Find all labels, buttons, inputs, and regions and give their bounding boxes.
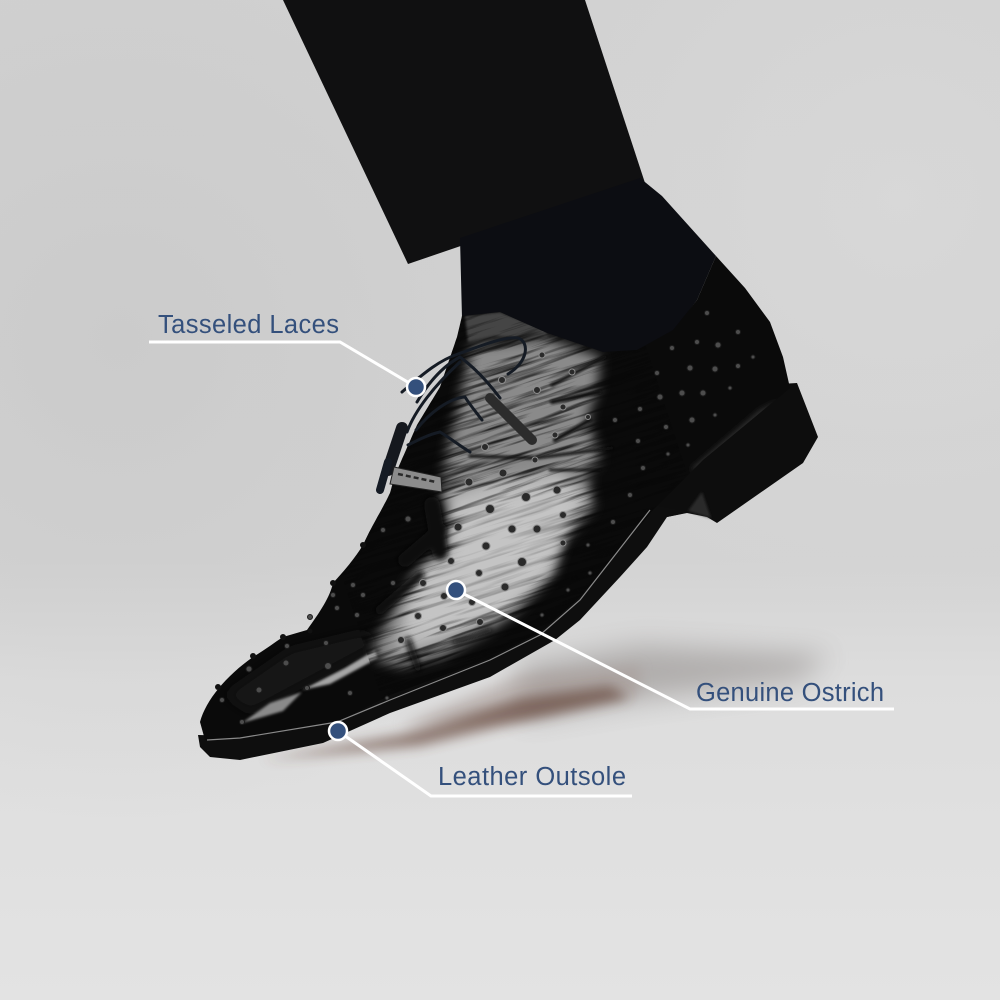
dark quill streaks <box>470 357 612 470</box>
heel wedge highlight <box>688 492 711 518</box>
upper gray zone <box>375 338 600 667</box>
leather grain texture <box>341 314 607 672</box>
upper base <box>200 256 790 740</box>
callout: Leather Outsole: Leather Outsole <box>438 763 626 791</box>
heel block <box>640 383 818 523</box>
collar tab <box>465 312 548 342</box>
ostrich leather highlights <box>236 312 772 736</box>
callout: Tasseled Laces <box>149 311 425 396</box>
welt line <box>207 510 650 740</box>
shoe <box>198 244 818 760</box>
laces and tassels <box>380 338 532 490</box>
toe quill silhouettes <box>215 542 366 690</box>
callout: Genuine Ostrich <box>447 581 894 709</box>
back quarter sheen <box>691 402 772 470</box>
lit quill bumps <box>398 352 590 644</box>
outsole <box>198 505 690 760</box>
callout: Genuine Ostrich: Genuine Ostrich <box>696 679 884 707</box>
trouser leg <box>283 0 645 264</box>
bright vamp wash <box>410 490 575 630</box>
metal lace tip <box>390 467 442 492</box>
toe sheen <box>236 638 366 706</box>
callout: Leather Outsole <box>329 722 632 796</box>
dark folds <box>380 505 490 668</box>
callout: Tasseled Laces: Tasseled Laces <box>158 311 339 339</box>
sock <box>460 178 716 354</box>
dim quill bumps <box>220 310 755 724</box>
shoe shadow <box>262 645 830 760</box>
